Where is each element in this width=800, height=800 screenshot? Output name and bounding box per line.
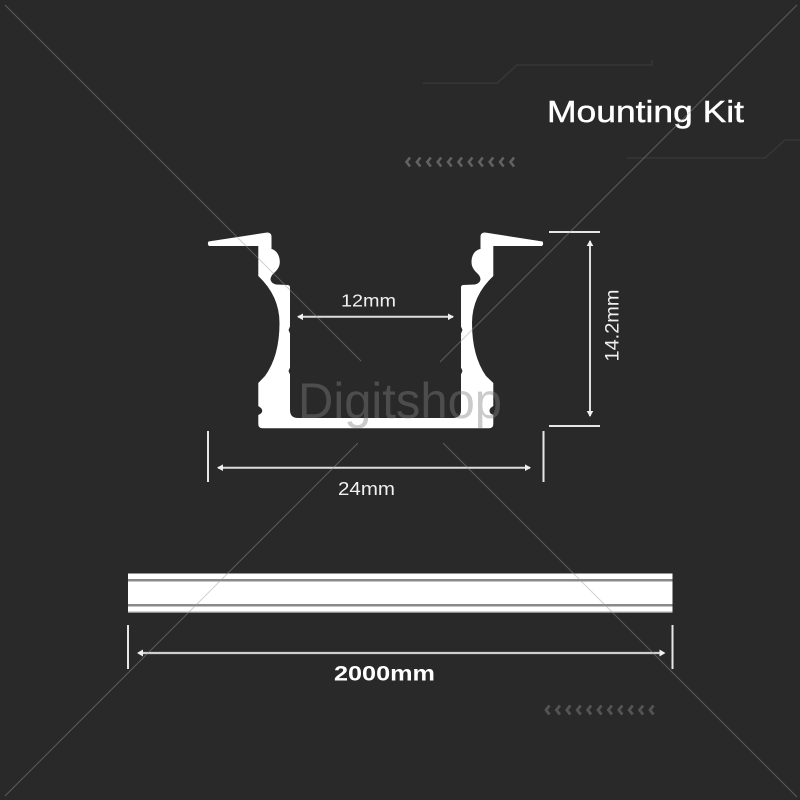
dimension: 2000mm — [128, 625, 672, 686]
profile side view bar — [128, 574, 672, 613]
dimension: 12mm — [297, 290, 454, 320]
watermark text: Digitshop — [298, 373, 502, 429]
chevron row: bottom — [546, 706, 654, 714]
dimension: 14.2mm — [549, 232, 624, 426]
dimension: 24mm: 24mm — [338, 479, 395, 499]
dimension: 14.2mm: 14.2mm — [602, 290, 624, 362]
dimension: 2000mm: 2000mm — [334, 662, 435, 686]
dimension: 24mm — [208, 431, 544, 499]
profile cross-section — [208, 232, 543, 428]
dimension: 12mm: 12mm — [341, 290, 396, 310]
chevron row: top — [406, 158, 514, 166]
title: Mounting Kit — [547, 94, 744, 129]
